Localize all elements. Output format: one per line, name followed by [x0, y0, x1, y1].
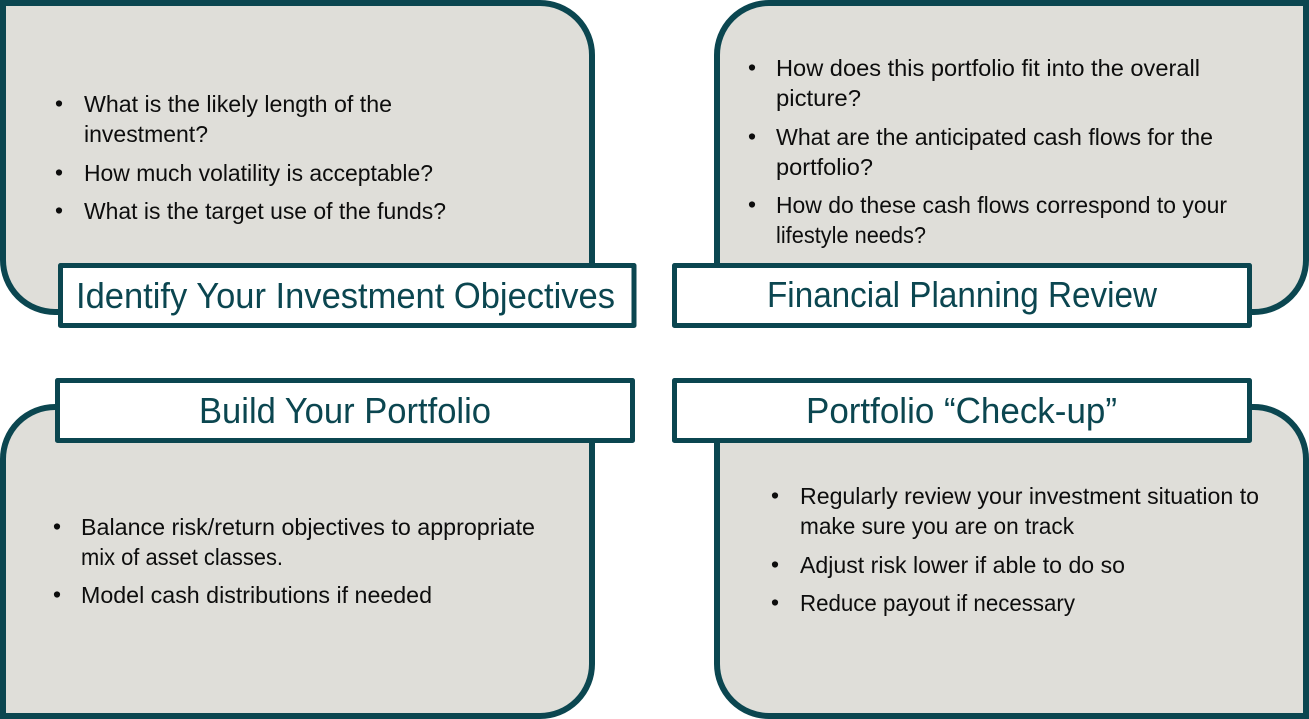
- panel: build your portfolio: [3, 380, 632, 716]
- card background: [3, 407, 592, 716]
- bullet list: [749, 55, 1227, 248]
- card background: [717, 407, 1306, 716]
- bullet list: What is the likely length of the: [84, 91, 392, 117]
- bullet list: investment?: [84, 121, 208, 147]
- bullet list: How does this portfolio fit into the overall: [776, 55, 1200, 81]
- card background: [717, 3, 1306, 312]
- bullet list: picture?: [776, 85, 861, 111]
- bullet list: How do these cash flows correspond to your: [776, 192, 1227, 218]
- heading box: Financial Planning Review: [767, 274, 1158, 315]
- bullet list: [54, 514, 535, 608]
- bullet list: How much volatility is acceptable?: [84, 160, 433, 186]
- bullet list: What are the anticipated cash flows for the: [776, 124, 1213, 150]
- bullet list: Balance risk/return objectives to appropriate: [81, 514, 535, 540]
- bullet list: portfolio?: [776, 154, 873, 180]
- bullet list: Regularly review your investment situation to: [800, 483, 1259, 509]
- card background: [3, 3, 592, 312]
- bullet list: Adjust risk lower if able to do so: [800, 552, 1125, 578]
- heading box: [674, 380, 1250, 440]
- heading box: [60, 266, 634, 326]
- bullet list: What is the target use of the funds?: [84, 198, 446, 224]
- bullet list: Reduce payout if necessary: [800, 590, 1075, 616]
- bullet list: lifestyle needs?: [776, 222, 926, 248]
- panel: portfolio check-up: [674, 380, 1306, 716]
- heading box: Build Your Portfolio: [199, 390, 491, 431]
- bullet list: mix of asset classes.: [81, 544, 283, 570]
- bullet list: make sure you are on track: [800, 513, 1074, 539]
- heading box: [58, 380, 632, 440]
- bullet list: [772, 483, 1259, 616]
- heading box: Portfolio “Check-up”: [806, 390, 1117, 431]
- heading box: Identify Your Investment Objectives: [76, 275, 615, 316]
- bullet list: [56, 91, 446, 224]
- panel: financial planning review: [674, 3, 1306, 326]
- bullet list: Model cash distributions if needed: [81, 582, 432, 608]
- heading box: [674, 266, 1250, 326]
- panel: identify your investment objectives: [3, 3, 634, 326]
